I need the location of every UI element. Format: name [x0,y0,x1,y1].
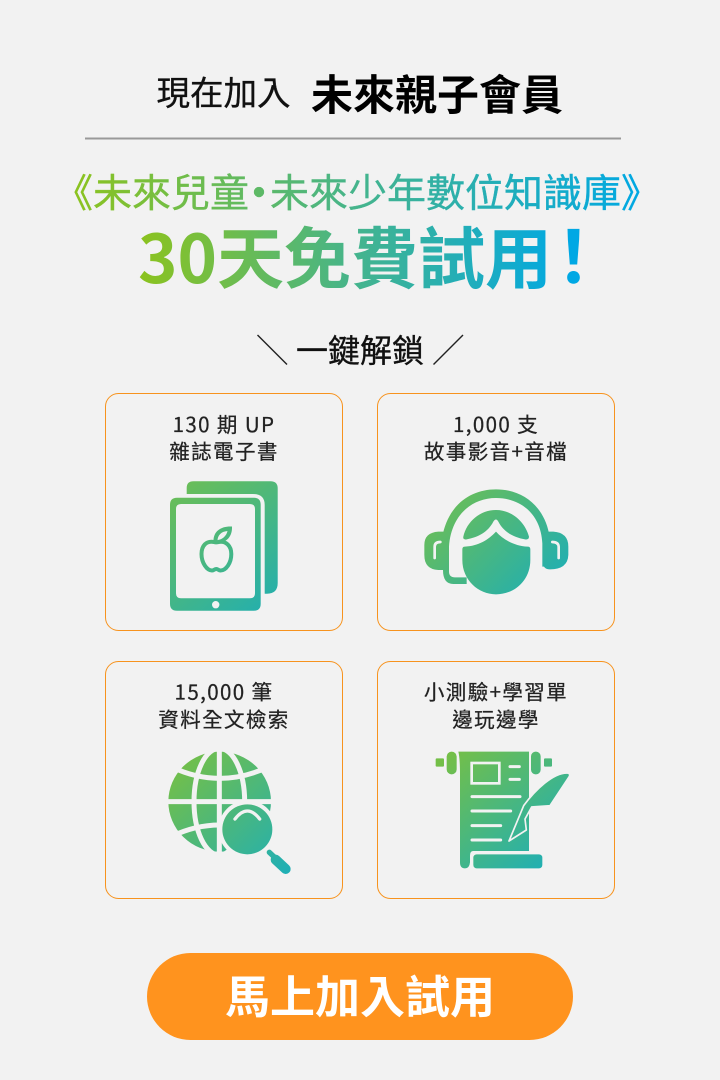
panel text: e-magazines [169,408,279,465]
panel text: full-text search: 資料全文檢索 [158,703,290,733]
icon: scroll with quill [436,752,570,868]
panel: e-magazines [106,394,342,630]
panel text: audio stories [424,408,568,465]
panel text: quizzes and worksheets: 小測驗+學習單 [424,676,568,706]
panel text: e-magazines: 130 期 UP [173,408,275,438]
panel text: full-text search: 15,000 筆 [175,676,273,706]
panel text: audio stories: 1,000 支 [453,408,539,438]
panel: quizzes and worksheets [378,662,614,898]
panel: full-text search [106,662,342,898]
subtitle: 《未來兒童 [54,163,249,219]
subtitle: 未來少年數位知識庫》 [270,163,660,219]
panel text: e-magazines: 雜誌電子書 [169,435,279,465]
button: join trial: 馬上加入試用 [225,961,495,1026]
subtitle: ‧ [239,163,279,219]
button: join trial [147,953,573,1040]
icon: headset [424,489,568,594]
title [156,62,563,123]
panel text: quizzes and worksheets: 邊玩邊學 [452,703,540,733]
subtitle [54,163,660,219]
icon: tablet with apple [170,481,278,611]
panel text: full-text search [158,676,290,733]
title: 未來親子會員 [311,62,563,123]
headline: 30 day free trial: 30天免費試用 [138,206,552,303]
icon: globe with magnifier [165,747,286,869]
panel text: quizzes and worksheets [424,676,568,733]
panel: audio stories [378,394,614,630]
unlock heading [258,326,463,372]
headline: 30 day free trial: ！ [537,199,610,304]
unlock heading: 一鍵解鎖 [296,326,424,372]
panel text: audio stories: 故事影音+音檔 [424,435,568,465]
title: 現在加入 [156,66,290,115]
